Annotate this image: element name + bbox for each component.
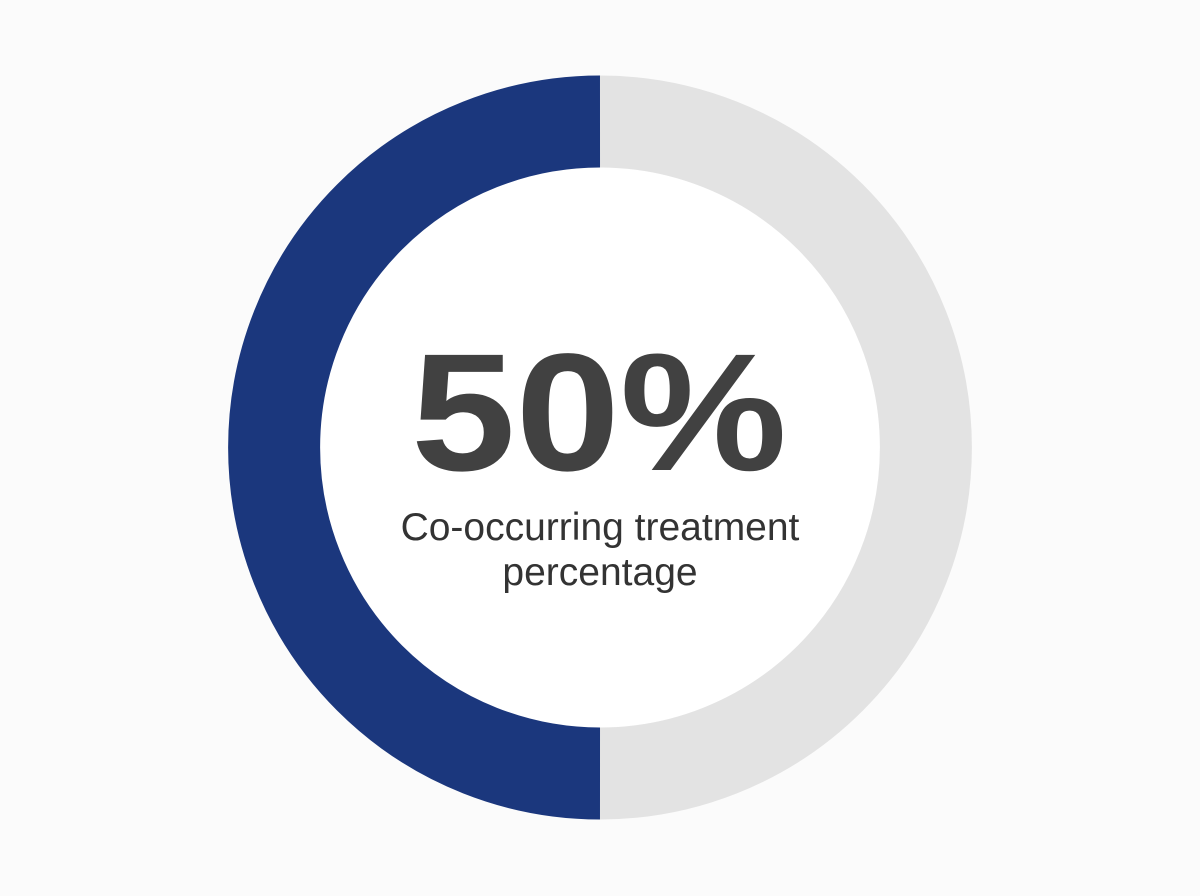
- inner white disc: [320, 168, 880, 728]
- label text: percentage: [502, 551, 698, 594]
- label text: [401, 506, 800, 594]
- label text: Co-occurring treatment: [401, 506, 800, 549]
- ring: remaining portion (grey, right half): [600, 122, 926, 774]
- ring: 50% portion (navy, left half): [274, 122, 600, 774]
- big percentage value: 50%: [411, 319, 787, 506]
